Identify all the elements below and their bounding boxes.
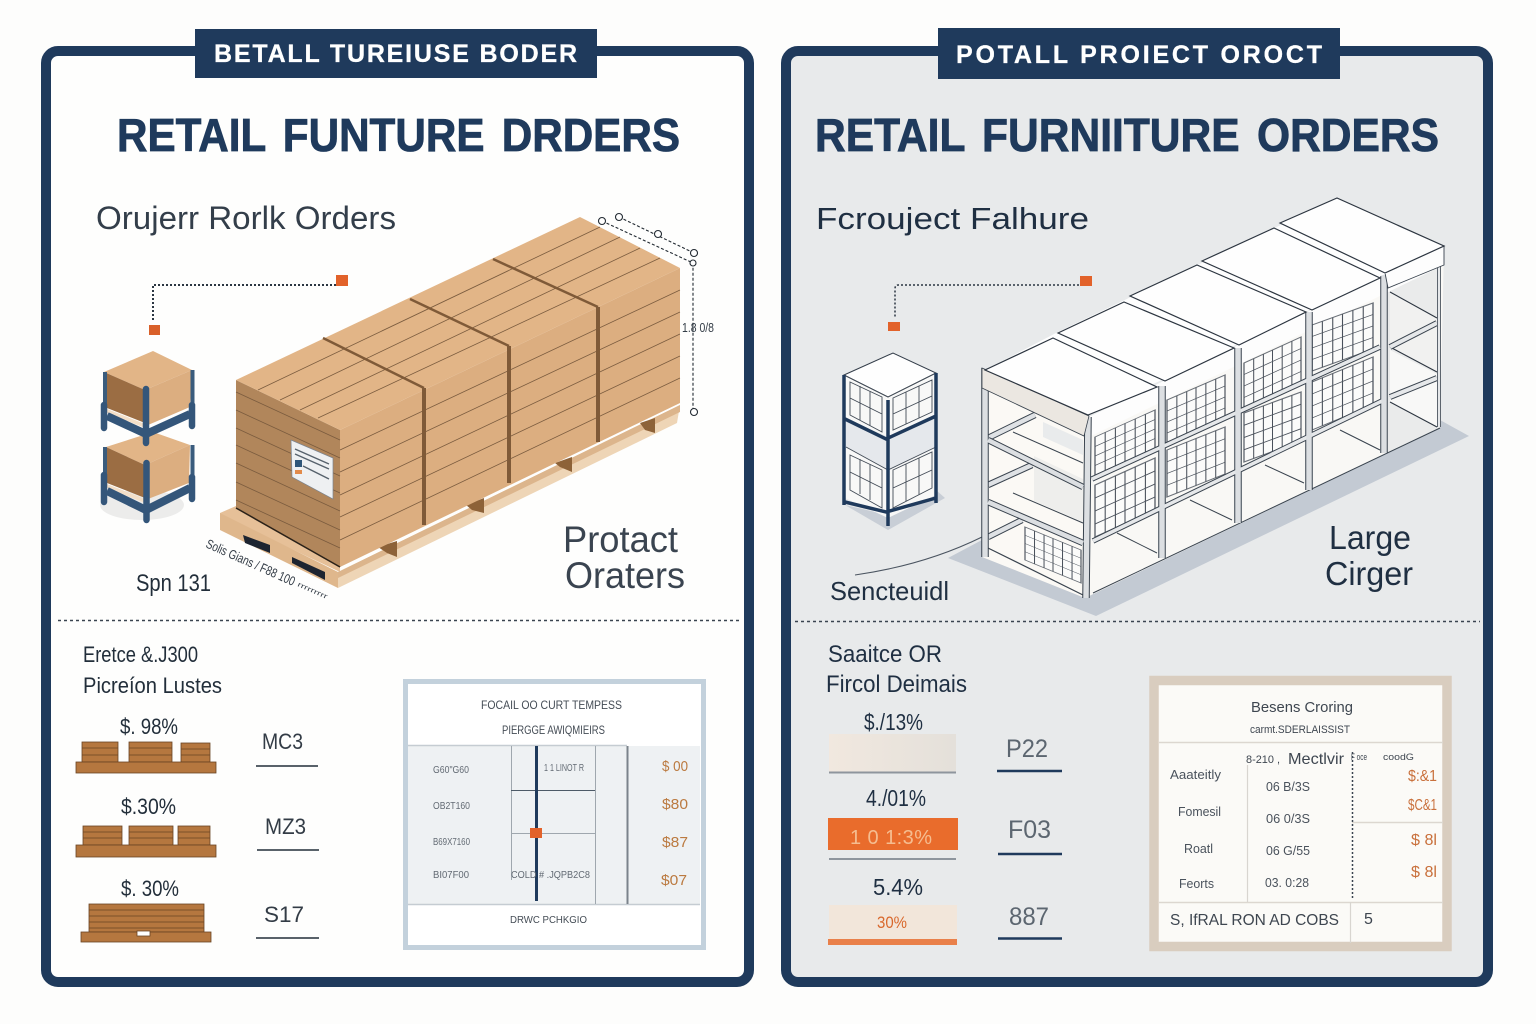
row 3: bar value: 5.4% xyxy=(873,874,923,900)
table header: 8-210 , xyxy=(1246,754,1280,766)
glazed grid panels xyxy=(1025,303,1373,583)
row 2: pallet value xyxy=(76,794,319,857)
shelf beams and posts: fill xyxy=(985,265,1439,598)
shelf beams and posts: outlines xyxy=(985,265,1439,598)
section heading: Fcrouject Falhure xyxy=(816,201,1089,236)
braces and floor lines xyxy=(1013,428,1440,593)
table header: Besens Croring xyxy=(1251,699,1353,716)
table prices: $ 8l xyxy=(1411,832,1437,849)
table header: FOCAIL OO CURT TEMPESS xyxy=(481,698,622,712)
label: large cirger: Cirger xyxy=(1325,555,1413,592)
leader line xyxy=(855,537,982,575)
table header: carmt.SDERLAISSIST xyxy=(1250,724,1350,736)
table footer: 5 xyxy=(1364,911,1373,928)
data table xyxy=(1154,680,1447,946)
table rows: 03. 0:28 xyxy=(1265,875,1309,890)
carton ribs xyxy=(236,227,680,548)
top shelves xyxy=(985,198,1444,415)
subheading xyxy=(83,642,222,698)
tab banner: POTALL PROIECT OROCT xyxy=(956,41,1322,69)
row 2: pallet value: $.30% xyxy=(121,794,176,819)
table rows xyxy=(433,763,590,881)
label: large cirger xyxy=(1325,519,1413,592)
main heading: RETAIL FURNIITURE ORDERS xyxy=(815,109,1439,161)
bar xyxy=(829,734,956,772)
row 3: bar value: 30% xyxy=(877,913,907,932)
row 1: pallet value: MC3 xyxy=(262,729,303,754)
rack end bay xyxy=(982,368,1088,598)
table rows: Roatl xyxy=(1184,841,1213,856)
fascia side xyxy=(1089,246,1444,437)
table rows: B69X7160 xyxy=(433,837,470,848)
subheading: Fircol Deimais xyxy=(826,671,967,698)
row 3: pallet value: S17 xyxy=(264,902,304,927)
carton base edge xyxy=(236,508,340,567)
data table xyxy=(406,682,704,948)
pallet caption: rrrrrrrrr xyxy=(296,581,329,601)
row 3: bar value: 887 xyxy=(1009,903,1049,931)
table prices xyxy=(1408,768,1437,881)
table prices: $07 xyxy=(661,872,687,889)
subheading: Saaitce OR xyxy=(828,641,942,668)
table rows: 06 B/3S xyxy=(1266,779,1310,794)
bar xyxy=(828,818,958,850)
panel: right project orders xyxy=(786,28,1488,982)
table rows: COLD # .JQPB2C8 xyxy=(511,870,590,881)
row 2: bar value xyxy=(828,785,1062,859)
row 1: pallet value xyxy=(76,714,318,773)
table header xyxy=(481,698,622,737)
table header: PIERGGE AWIQMIEIRS xyxy=(502,723,605,737)
floor shadow xyxy=(948,420,1469,616)
row 2: bar value: F03 xyxy=(1008,816,1051,844)
table rows: 1 1 LINOT R xyxy=(544,763,584,774)
label: sencteuidl: Sencteuidl xyxy=(830,576,949,606)
tab banner xyxy=(938,28,1340,79)
label: protact orders xyxy=(563,519,685,596)
table rows: Fomesil xyxy=(1178,804,1221,819)
row 2: bar value: 4./01% xyxy=(866,785,926,811)
row 2: pallet value: MZ3 xyxy=(265,814,306,839)
last open bay xyxy=(1388,262,1441,453)
row 1: pallet value: $. 98% xyxy=(120,714,178,739)
pallet caption: Solis Gians / F88 100 xyxy=(204,536,298,589)
bar xyxy=(829,905,957,939)
main heading: RETAIL FUNTURE DRDERS xyxy=(117,109,680,161)
table rows: 06 0/3S xyxy=(1266,811,1310,826)
table rows: Feorts xyxy=(1179,876,1214,891)
table prices xyxy=(661,758,688,889)
icon: pallet of three crates xyxy=(76,826,216,857)
table prices: $ 00 xyxy=(662,758,688,775)
table prices: $:&1 xyxy=(1408,768,1437,785)
panel frame xyxy=(46,51,749,982)
row 3: pallet value: $. 30% xyxy=(121,876,179,901)
table prices: $ 8l xyxy=(1411,864,1437,881)
subheading xyxy=(826,641,967,698)
straps xyxy=(323,259,598,525)
table prices: $C&1 xyxy=(1408,797,1437,814)
tab banner xyxy=(195,29,597,78)
section heading: Orujerr Rorlk Orders xyxy=(96,200,396,236)
table rows: Aaateitly xyxy=(1170,767,1221,782)
illustration: large strapped pallet load xyxy=(220,217,680,588)
subheading: Picreíon Lustes xyxy=(83,673,222,698)
row 1: bar value: $./13% xyxy=(864,709,923,735)
table rows xyxy=(1170,767,1310,891)
table rows: OB2T160 xyxy=(433,801,470,812)
callout connector xyxy=(149,275,348,335)
dimension label: 1.8 0/8 xyxy=(682,320,714,335)
icon: solid wood crate xyxy=(81,904,211,942)
subheading: Eretce &.J300 xyxy=(83,642,198,667)
icon: pallet of three crates xyxy=(76,742,216,773)
top fascia xyxy=(982,368,1089,436)
table header: Mectlvir xyxy=(1288,751,1345,768)
label: protact orders: Protact xyxy=(563,519,679,560)
lower crate xyxy=(104,432,192,520)
table header: coodG xyxy=(1383,752,1414,762)
table header xyxy=(1246,699,1414,768)
icon: small stacked rack xyxy=(844,353,945,530)
table header: F oce xyxy=(1351,752,1367,762)
panel frame xyxy=(786,51,1488,982)
table footer: DRWC PCHKGIO xyxy=(510,915,587,926)
table rows: 06 G/55 xyxy=(1266,843,1310,858)
table rows: BI07F00 xyxy=(433,870,469,881)
panel: left retail orders xyxy=(46,29,749,982)
illustration: large open shelving rack xyxy=(855,198,1469,616)
rack side xyxy=(1085,247,1444,598)
row 3: pallet value xyxy=(81,876,319,942)
table prices: $80 xyxy=(662,796,688,813)
dimension markers xyxy=(598,214,698,416)
table footer: S, IfRAL RON AD COBS xyxy=(1170,912,1339,929)
shipping label xyxy=(291,440,333,499)
callout connector xyxy=(888,276,1092,331)
row 1: bar value xyxy=(829,709,1062,772)
row 3: bar value xyxy=(828,874,1062,945)
row 2: bar value: 1 0 1:3% xyxy=(850,827,932,849)
label: large cirger: Large xyxy=(1329,519,1411,556)
label: protact orders: Oraters xyxy=(565,555,685,596)
table prices: $87 xyxy=(662,834,688,851)
table rows: G60"G60 xyxy=(433,765,469,776)
tab banner: BETALL TUREIUSE BODER xyxy=(214,40,577,68)
carton faces xyxy=(236,380,340,567)
row 1: bar value: P22 xyxy=(1006,735,1048,763)
icon: small stacked crates xyxy=(100,351,192,520)
label: spn: Spn 131 xyxy=(136,570,211,597)
pallet xyxy=(220,405,680,588)
upper crate xyxy=(104,351,192,443)
